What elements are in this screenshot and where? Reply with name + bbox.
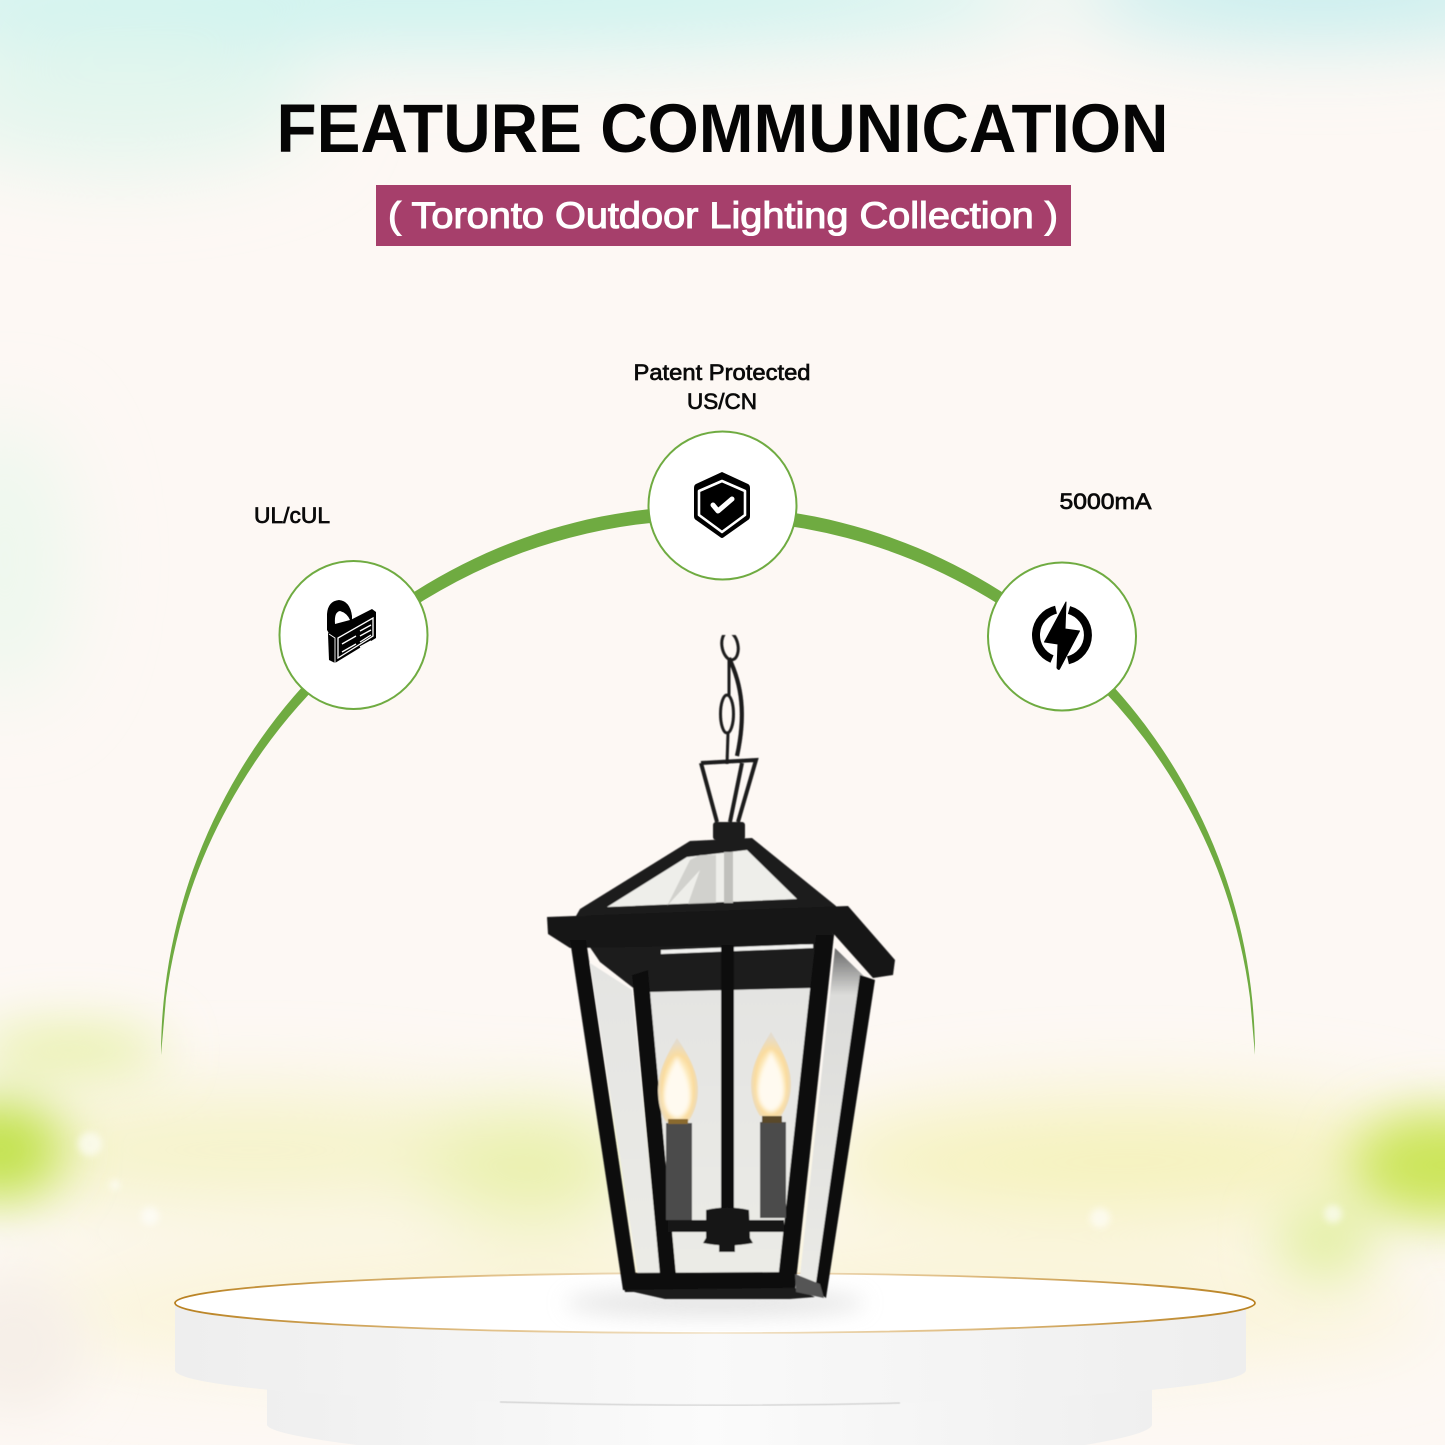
eave	[547, 906, 895, 978]
chain	[720, 631, 742, 764]
platform top	[175, 1273, 1255, 1333]
icon: shield with check	[694, 472, 750, 538]
lantern frame	[570, 935, 875, 1299]
green arc	[161, 506, 1255, 1055]
platform upper tier	[175, 1303, 1246, 1405]
lantern shadow	[565, 1289, 865, 1317]
label: UL/cUL: UL/cUL	[254, 503, 330, 528]
light strip	[661, 944, 813, 954]
title: FEATURE COMMUNICATION	[276, 90, 1168, 167]
circle: patent protected	[648, 432, 796, 580]
platform lower tier	[267, 1380, 1152, 1445]
feature: 5000mA	[988, 489, 1152, 710]
icon: certified plate	[327, 600, 376, 663]
roof	[576, 838, 836, 916]
feature: UL/cUL	[254, 503, 428, 709]
center hub	[668, 1208, 784, 1252]
circle: UL/cUL	[280, 561, 428, 709]
subtitle banner: ( Toronto Outdoor Lighting Collection )	[388, 195, 1058, 236]
feature: patent protected	[634, 360, 810, 580]
label: 5000mA: 5000mA	[1060, 489, 1152, 514]
candle left	[658, 1038, 698, 1220]
label: patent protected: Patent Protected	[634, 360, 810, 385]
circle: 5000mA	[988, 562, 1136, 710]
label: patent protected: US/CN	[687, 389, 757, 414]
lantern glass	[590, 963, 660, 1275]
candle right	[751, 1032, 791, 1218]
subtitle banner	[376, 185, 1071, 246]
icon: power bolt	[1036, 602, 1088, 670]
platform	[175, 1273, 1255, 1445]
hanger	[701, 760, 756, 822]
lantern inner dark body	[585, 932, 835, 997]
product: lantern	[547, 631, 895, 1299]
